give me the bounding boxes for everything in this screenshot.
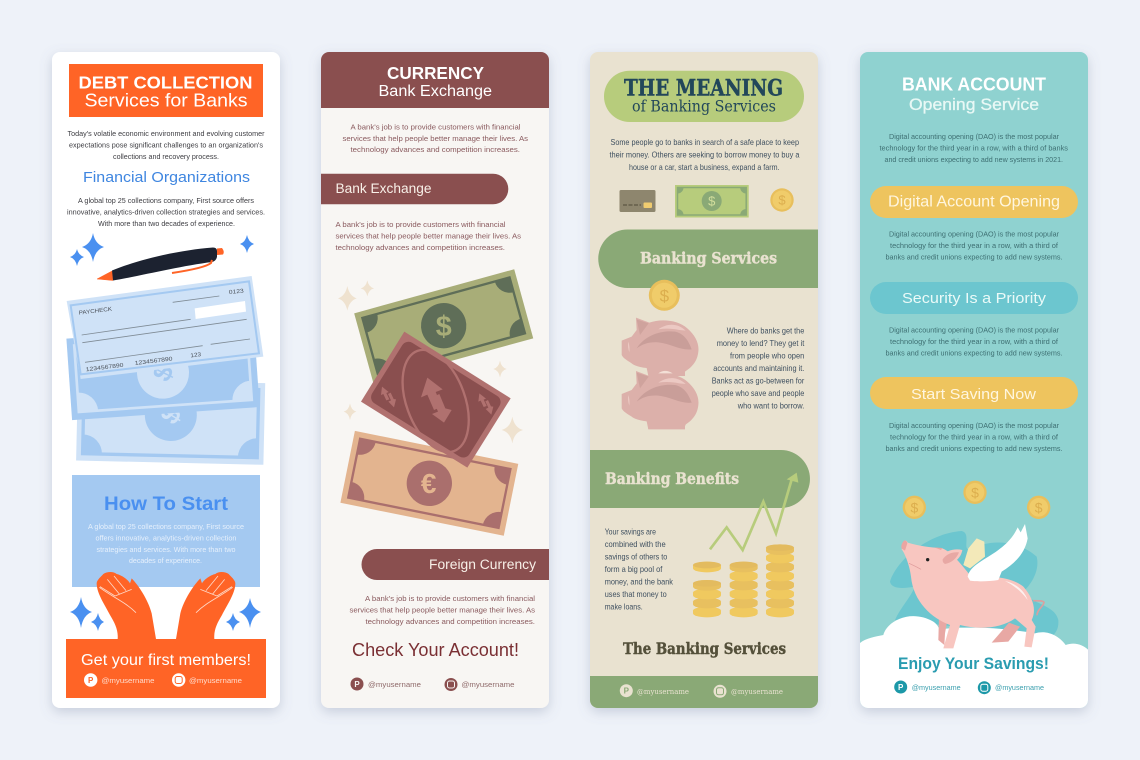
stack 3: [766, 544, 794, 617]
icon: credit card: [620, 190, 656, 212]
text block: your savings: uses that money to: [605, 589, 667, 599]
text block: your savings: Your savings are: [605, 526, 656, 536]
intro text: [68, 129, 265, 161]
coins: $: [1035, 499, 1043, 515]
icon: cheques and notes: $: [154, 401, 188, 429]
intro text: technology advances and competition increases.: [350, 145, 520, 154]
heading: enjoy your savings: Enjoy Your Savings!: [898, 654, 1049, 673]
icon: cheques and notes: 1234567890: [135, 356, 173, 367]
far legs: [938, 620, 947, 645]
text block: your savings: savings of others to: [605, 552, 667, 562]
social handles: @myusername: [462, 680, 514, 689]
coins: $: [910, 499, 918, 515]
label: security is a priority: [870, 282, 1078, 314]
icon: coin over pig: $: [660, 286, 670, 306]
note: dollar: $: [436, 311, 452, 343]
text block: banks and credit unions expecting to add new systems.: [886, 252, 1062, 262]
icon: sparkles bottom: [70, 597, 261, 631]
panel: debt collection: [52, 52, 280, 708]
intro text: technology for the third year in a row, with a third of banks: [880, 144, 1068, 152]
text block: services that help people better manage their lives. As: [350, 606, 535, 614]
social handles: @myusername: [912, 683, 961, 692]
note: euro: [340, 430, 518, 536]
icon: cheques and notes: 0123: [229, 288, 244, 296]
icon: cheques and notes: 1234567890: [86, 363, 124, 373]
panel: meaning of banking services: [590, 52, 818, 708]
heading: check your account: Check Your Account!: [352, 640, 519, 660]
panel: currency: [321, 52, 549, 708]
label: banking services: Banking Services: [640, 248, 777, 268]
panel: how to start: strategies and services. With more than two: [96, 545, 236, 554]
ear: [948, 549, 962, 560]
footer: @myusername: [637, 687, 690, 696]
text block: where do banks get the money: [712, 326, 805, 410]
icon: hands: [97, 572, 235, 639]
front wing: [968, 524, 1028, 581]
title pill: [604, 71, 804, 122]
note: exchange: [361, 332, 511, 468]
text block: technology for the third year in a row, with a third of: [890, 337, 1058, 346]
intro text: expectations pose significant challenges to an organization's: [69, 140, 263, 150]
social handles: @myusername: [995, 683, 1044, 692]
icon: coin: $: [778, 192, 786, 208]
title pill: THE MEANING: [624, 76, 783, 102]
text block: where do banks get the money: Where do banks get the: [727, 326, 804, 336]
header: CURRENCY: [387, 63, 484, 83]
text block: technology for the third year in a row, with a third of: [890, 241, 1058, 250]
back wing: [963, 538, 985, 568]
label: banking benefits: [590, 450, 810, 508]
heading: the banking services: The Banking Services: [623, 639, 786, 658]
text block: [350, 594, 535, 626]
intro text: Today's volatile economic environment and evolving customer: [68, 129, 265, 138]
label: security is a priority: Security Is a Priority: [902, 290, 1047, 307]
label: start saving now: Start Saving Now: [911, 386, 1036, 403]
cloud: [860, 616, 1088, 710]
text block: With more than two decades of experience.: [98, 219, 235, 228]
label: banking benefits: Banking Benefits: [605, 469, 739, 488]
text block: technology advances and competition increases.: [366, 617, 535, 626]
icon: coin over pig: [649, 280, 680, 311]
sparkles: [338, 280, 523, 443]
intro text: [610, 137, 800, 172]
text block: technology for the third year in a row, with a third of: [890, 432, 1058, 442]
title: [902, 75, 1046, 114]
intro text: Digital accounting opening (DAO) is the most popular: [889, 132, 1060, 141]
icon: cheques and notes: PAYCHECK: [79, 307, 113, 317]
intro text: services that help people better manage their lives. As: [342, 134, 528, 143]
tail: [1033, 601, 1044, 615]
label: banking services: [598, 230, 818, 288]
panel: how to start: A global top 25 collections company, First source: [88, 522, 244, 531]
text block: your savings: make loans.: [605, 602, 643, 612]
panel: how to start: offers innovative, analytics-driven collection: [96, 534, 236, 542]
header: Bank Exchange: [378, 83, 492, 100]
social handles: P: [354, 680, 360, 689]
panel: how to start: decades of experience.: [129, 556, 202, 565]
header: [321, 52, 549, 108]
text block: A bank's job is to provide customers with financial: [336, 220, 506, 229]
text block: Digital accounting opening (DAO) is the most popular: [889, 230, 1060, 238]
intro text: their money. Others are seeking to borrow money to buy a: [610, 150, 800, 160]
social handles: P: [898, 683, 904, 692]
intro text: house or a car, start a business, expand a farm.: [629, 162, 780, 172]
social handles: [894, 680, 1044, 694]
title block: DEBT COLLECTION: [78, 72, 252, 92]
icon: cheques and notes: [66, 276, 266, 465]
label: digital account opening: Digital Account Opening: [888, 194, 1060, 211]
text block: your savings: combined with the: [605, 539, 666, 549]
note: dollar: [354, 269, 534, 382]
text block: banks and credit unions expecting to add new systems.: [886, 444, 1062, 453]
icon: banknote: $: [708, 194, 716, 208]
text block: [886, 230, 1062, 262]
intro text: [342, 122, 528, 154]
icon: pen: [97, 248, 224, 280]
icon: cheques and notes: $: [146, 359, 180, 386]
icon: coin: [770, 188, 794, 212]
label: bank exchange: [321, 174, 508, 204]
illustration: piggy banks: [622, 318, 698, 429]
intro text: Some people go to banks in search of a safe place to keep: [610, 137, 799, 147]
label: bank exchange: Bank Exchange: [336, 181, 432, 196]
text block: where do banks get the money: accounts and maintaining it.: [713, 363, 804, 373]
note: euro: €: [421, 468, 437, 499]
text block: where do banks get the money: people who save and people: [712, 388, 804, 398]
text block: [336, 220, 521, 252]
text block: where do banks get the money: from people who open: [730, 350, 804, 360]
footer: get your first members: P: [88, 676, 94, 685]
icon: sparkles top: [70, 233, 254, 266]
smile: [909, 563, 921, 569]
intro text: A bank's job is to provide customers with financial: [350, 122, 521, 132]
stack 2: [730, 562, 758, 617]
text block: [886, 421, 1062, 453]
label: foreign currency: [362, 549, 549, 580]
text block: A bank's job is to provide customers with financial: [365, 594, 535, 603]
text block: [67, 196, 265, 228]
social handles: [350, 678, 514, 691]
footer: [590, 676, 818, 708]
text block: your savings: [605, 526, 674, 612]
blob: [890, 531, 1058, 637]
social handles: @myusername: [368, 680, 421, 689]
eye: [926, 558, 929, 561]
text block: where do banks get the money: Banks act as go-between for: [712, 376, 804, 386]
footer: P: [624, 687, 630, 696]
panel: bank account: [860, 52, 1088, 710]
footer: get your first members: Get your first members!: [81, 652, 251, 669]
text block: your savings: form a big pool of: [605, 564, 663, 574]
stack 1: [693, 562, 721, 617]
footer: @myusername: [731, 687, 784, 696]
panel: how to start: How To Start: [104, 494, 229, 515]
illustration: flying pig: [860, 481, 1088, 710]
panel: how to start: [72, 475, 260, 587]
title pill: of Banking Services: [632, 97, 776, 116]
heading: financial organizations: Financial Organizations: [83, 169, 250, 186]
illustration: bank notes: [338, 269, 534, 536]
title block: [69, 64, 263, 117]
label: digital account opening: [870, 186, 1078, 218]
icon: cheques and notes: 123: [190, 352, 201, 359]
text block: A global top 25 collections company, First source offers: [78, 196, 254, 205]
label: start saving now: [870, 377, 1078, 409]
intro text: and credit unions expecting to add new systems in 2021.: [884, 155, 1063, 164]
footer: get your first members: @myusername: [189, 676, 242, 685]
intro text: collections and recovery process.: [113, 152, 219, 161]
label: foreign currency: Foreign Currency: [429, 557, 536, 572]
text block: technology advances and competition increases.: [336, 243, 505, 252]
text block: innovative, analytics-driven collection strategies and services.: [67, 208, 265, 216]
text block: your savings: money, and the bank: [605, 576, 674, 586]
title block: Services for Banks: [84, 90, 248, 110]
text block: where do banks get the money: who want to borrow.: [737, 400, 804, 410]
intro text: [880, 132, 1068, 164]
text block: services that help people better manage their lives. As: [336, 232, 521, 240]
footer: get your first members: [66, 639, 266, 698]
chart: coin stacks and arrow: [693, 473, 798, 617]
text block: Digital accounting opening (DAO) is the most popular: [889, 421, 1060, 430]
coins: [903, 481, 1050, 519]
title: Opening Service: [909, 96, 1039, 114]
text block: [886, 326, 1062, 358]
text block: where do banks get the money: money to lend? They get it: [717, 338, 805, 348]
footer: get your first members: @myusername: [102, 676, 154, 685]
text block: banks and credit unions expecting to add new systems.: [886, 348, 1062, 358]
title: BANK ACCOUNT: [902, 75, 1046, 95]
icon: banknote: [675, 185, 749, 218]
coins: $: [971, 484, 979, 500]
text block: Digital accounting opening (DAO) is the most popular: [889, 326, 1060, 334]
body: [902, 541, 1036, 648]
